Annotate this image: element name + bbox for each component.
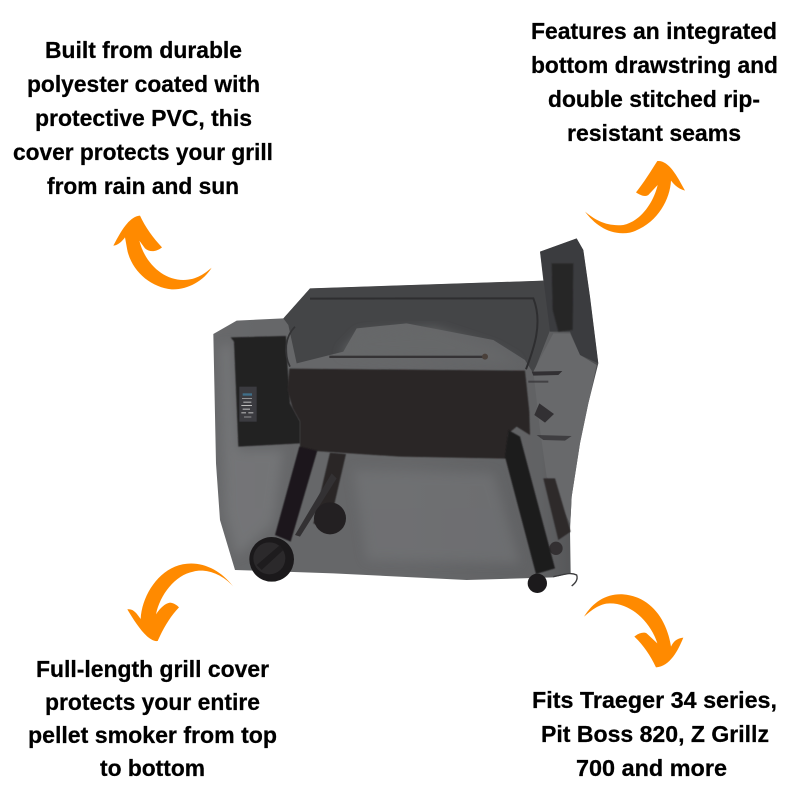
- barrel handle: [329, 354, 488, 360]
- text: durable polyester and PVC coating: from rain and sun: [47, 173, 239, 199]
- text: drawstring and stitched seams: [531, 18, 778, 146]
- text: durable polyester and PVC coating: [13, 37, 273, 199]
- text: compatible grills: [532, 687, 777, 781]
- text: full-length protection: Full-length grill cover: [36, 656, 269, 682]
- drawstring: [553, 574, 577, 586]
- text: drawstring and stitched seams: double stitched rip-: [548, 86, 760, 112]
- chimney: [552, 263, 573, 332]
- rear hardware details: [528, 371, 572, 441]
- illustration: pellet grill under translucent cover: [213, 238, 598, 593]
- control panel: [239, 387, 257, 422]
- text: compatible grills: Pit Boss 820, Z Grillz: [541, 721, 769, 747]
- arrow: top left, pointing up-left: [113, 216, 212, 289]
- text: drawstring and stitched seams: bottom drawstring and: [531, 52, 778, 78]
- rear right wheel: [549, 542, 563, 555]
- text: full-length protection: protects your entire: [45, 689, 260, 715]
- front right wheel: [528, 574, 547, 593]
- control box: [231, 336, 300, 447]
- text: durable polyester and PVC coating: protective PVC, this: [35, 105, 252, 131]
- barrel upper outline: [286, 298, 538, 369]
- text: full-length protection: [28, 656, 277, 781]
- cover body: [213, 238, 598, 580]
- text: durable polyester and PVC coating: cover protects your grill: [13, 139, 273, 165]
- text: durable polyester and PVC coating: Built from durable: [45, 37, 242, 63]
- arrow: top right, pointing up-right: [585, 161, 685, 233]
- arrow: bottom right, pointing down-right: [584, 594, 683, 667]
- text: durable polyester and PVC coating: polyester coated with: [27, 71, 260, 97]
- rear left wheel: [314, 502, 346, 534]
- axle strut: [295, 473, 337, 537]
- text: drawstring and stitched seams: resistant seams: [567, 120, 741, 146]
- left rear leg: [313, 453, 346, 530]
- arrow: bottom left, pointing down-left: [127, 563, 233, 641]
- left front leg: [275, 447, 317, 542]
- text: compatible grills: Fits Traeger 34 series,: [532, 687, 777, 713]
- right front leg: [505, 430, 555, 574]
- text: drawstring and stitched seams: Features an integrated: [531, 18, 777, 44]
- front left wheel: [249, 537, 294, 582]
- text: full-length protection: to bottom: [100, 755, 205, 781]
- barrel lower and front shelf: [287, 369, 530, 459]
- right rear leg: [543, 478, 571, 540]
- cover shading: [220, 238, 598, 563]
- text: full-length protection: pellet smoker from top: [28, 722, 277, 748]
- text: compatible grills: 700 and more: [576, 755, 727, 781]
